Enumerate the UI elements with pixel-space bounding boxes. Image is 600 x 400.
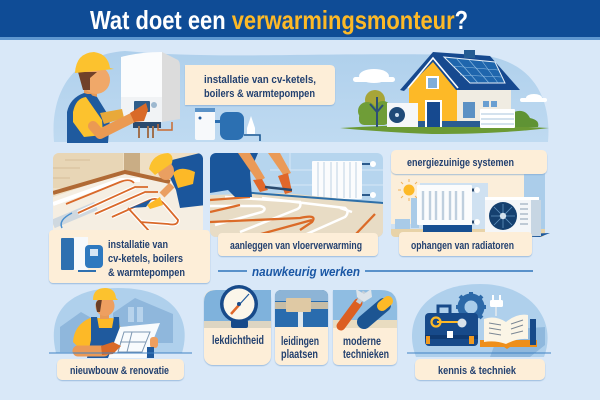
card: leidingen plaatsen: leidingen [281, 334, 319, 348]
worker [67, 52, 148, 143]
floor [210, 193, 383, 237]
icon: boiler tank and pump [195, 108, 260, 141]
buildings [60, 298, 173, 352]
label: energiezuinige systemen: energiezuinige systemen [407, 157, 514, 169]
label: installatie card: cv-ketels, boilers [108, 253, 183, 265]
ground [340, 125, 549, 134]
label: installatie card: installatie van [108, 239, 168, 251]
heading: nauwkeurig werken: nauwkeurig werken [252, 264, 360, 279]
label: radiatoren [399, 232, 532, 256]
icon: outdoor unit [387, 103, 418, 127]
card: moderne technieken: technieken [343, 347, 389, 361]
card: lekdichtheid: lekdichtheid [212, 333, 264, 347]
bush [514, 111, 538, 127]
panel: floor heating worker [53, 153, 206, 235]
radiator [312, 161, 376, 199]
tree [358, 90, 391, 127]
clouds [353, 69, 547, 102]
backdrop [412, 284, 548, 357]
panel: kennis and techniek [407, 284, 551, 357]
card: lekdichtheid [204, 285, 271, 365]
icon: plug [490, 295, 503, 316]
icon: gear [456, 292, 486, 322]
card: leidingen plaatsen: plaatsen [281, 347, 318, 361]
top background blob [54, 51, 548, 142]
worker [170, 153, 206, 208]
card: moderne technieken [333, 289, 397, 365]
radiator [480, 109, 515, 128]
panel: nieuwbouw and renovatie [49, 288, 192, 358]
label: kennis & techniek: kennis & techniek [438, 365, 517, 377]
title banner [0, 0, 600, 40]
icon: sun [398, 179, 420, 201]
worker arms [210, 153, 258, 197]
panel: energy-saving systems [391, 165, 550, 237]
label: kennis & techniek [415, 359, 545, 380]
icon: wall boiler [121, 52, 180, 138]
label: cv-ketels [185, 65, 335, 105]
label: vloerverwarming [218, 233, 378, 256]
icon: boiler set [61, 237, 103, 271]
card: leidingen plaatsen [275, 290, 328, 365]
label: nieuwbouw [57, 359, 184, 380]
label: nieuwbouw: nieuwbouw & renovatie [70, 365, 169, 377]
panel: floor heating and radiator [210, 153, 383, 237]
icon: open book [480, 315, 537, 349]
radiator [417, 185, 480, 232]
icon: heat pump unit [470, 197, 550, 237]
solar panel [444, 57, 505, 83]
label: installatie card [49, 230, 210, 283]
label: cv-ketels: installatie van cv-ketels, [204, 74, 316, 86]
card: moderne technieken: moderne [343, 334, 381, 348]
roof [400, 52, 520, 91]
panel: boiler installer [67, 52, 260, 143]
icon: cylinder tool [364, 301, 388, 322]
label: vloerverwarming: aanleggen van vloerverwarming [230, 240, 362, 252]
label: cv-ketels: boilers & warmtepompen [204, 88, 315, 100]
icon: toolbox [425, 306, 478, 346]
label: radiatoren: ophangen van radiatoren [411, 240, 514, 252]
icon: wrench [341, 289, 372, 326]
icon: gauge [220, 285, 258, 328]
illustration: house [340, 50, 549, 134]
title banner: Wat doet een verwarmingsmonteur? [90, 5, 468, 35]
floor heating scene [53, 153, 206, 235]
house walls [457, 90, 511, 127]
backdrop [54, 288, 185, 353]
label: installatie card: & warmtepompen [108, 267, 185, 279]
windows and door [426, 76, 439, 89]
label: energiezuinige systemen [391, 150, 547, 174]
worker and plan [73, 288, 160, 358]
